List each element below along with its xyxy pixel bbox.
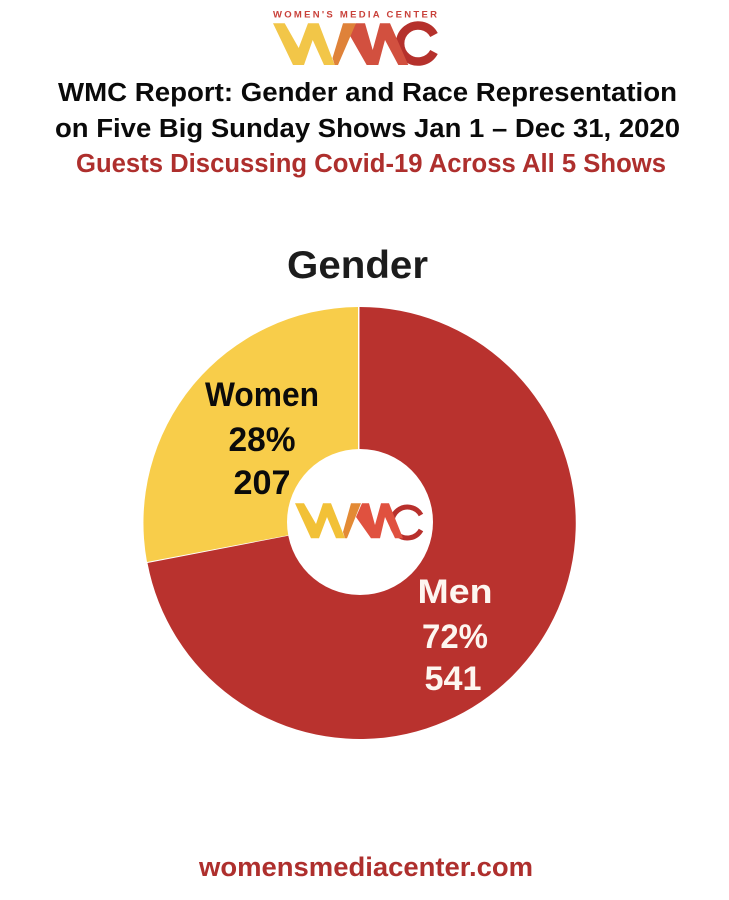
- label: women: 28%: [228, 421, 296, 459]
- logo tagline: WOMEN'S MEDIA CENTER: [273, 10, 437, 20]
- donut chart: gender: [143, 307, 576, 739]
- subheading: Guests Discussing Covid-19 Across All 5 Shows: [76, 150, 666, 178]
- label: women: Women: [205, 376, 319, 414]
- logo: Women's Media Center: [273, 10, 437, 65]
- label: men: [418, 573, 492, 698]
- chart title: Gender: [287, 244, 428, 287]
- label: men: 541: [424, 660, 482, 698]
- heading line 2: on Five Big Sunday Shows Jan 1 – Dec 31, 2020: [55, 115, 680, 143]
- label: women: 207: [234, 464, 290, 502]
- slice: men 72%: [148, 307, 576, 739]
- slice: women 28%: [143, 307, 358, 562]
- label: men: Men: [418, 573, 492, 611]
- center hole: [287, 449, 433, 595]
- center logo: [295, 503, 421, 538]
- logo mark WMC: [273, 23, 434, 65]
- label: women: [205, 376, 319, 502]
- footer url: womensmediacenter.com: [198, 852, 533, 882]
- heading line 1: WMC Report: Gender and Race Representation: [58, 79, 677, 107]
- label: men: 72%: [422, 618, 488, 656]
